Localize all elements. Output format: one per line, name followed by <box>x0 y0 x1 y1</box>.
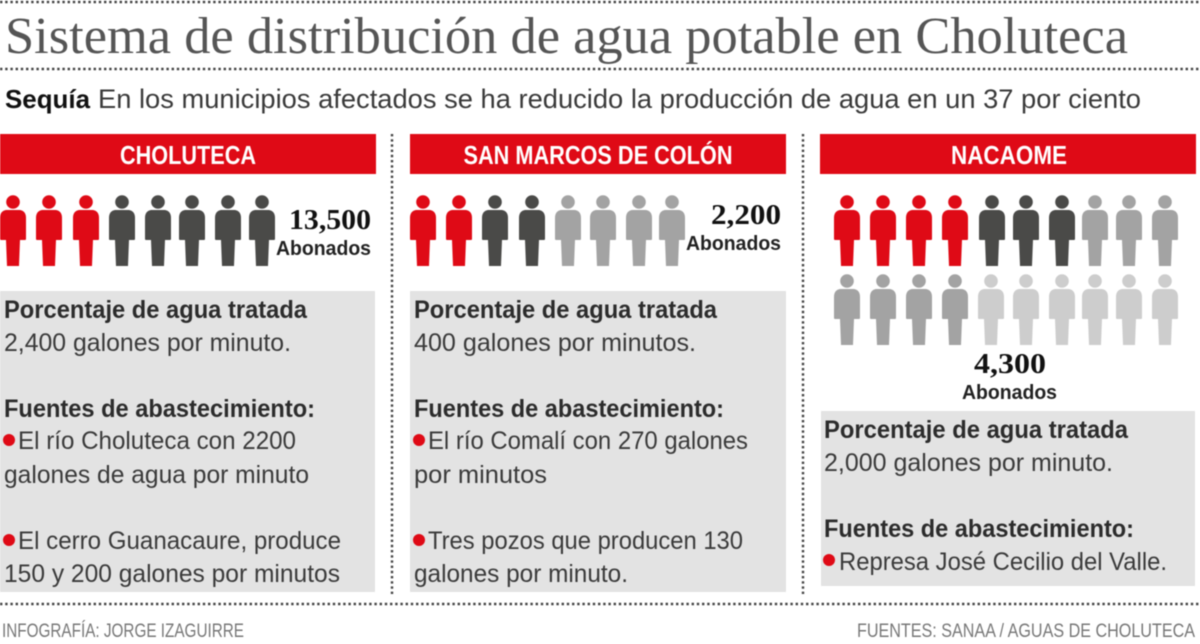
stat: 13,500 abonados: Abonados <box>276 238 371 260</box>
stat: 13,500 abonados <box>276 205 371 260</box>
info box: Choluteca: 150 y 200 galones por minutos <box>4 560 340 588</box>
title: Sistema de distribución de agua potable en Choluteca <box>5 8 1128 65</box>
stat: 4,300 abonados <box>962 349 1057 404</box>
subtitle: Sequía <box>5 84 91 114</box>
header: Choluteca <box>0 134 376 174</box>
info box: San Marcos de Colón: galones por minuto. <box>414 560 628 588</box>
info box: San Marcos de Colón: Tres pozos que producen 130 <box>428 527 743 555</box>
header: Choluteca: CHOLUTECA <box>120 140 256 170</box>
stat: 2,200 abonados <box>686 200 781 255</box>
header: Nacaome <box>820 134 1196 174</box>
pictogram: Nacaome subscribers <box>834 195 1178 345</box>
info box: Nacaome: 2,000 galones por minuto. <box>824 449 1113 477</box>
info box: San Marcos de Colón: 400 galones por minutos. <box>414 329 696 357</box>
info box: Choluteca: 2,400 galones por minuto. <box>4 329 291 357</box>
info box: Choluteca: El río Choluteca con 2200 <box>18 427 296 455</box>
info box: Nacaome: Fuentes de abastecimiento: <box>824 515 1134 543</box>
info box: Choluteca: galones de agua por minuto <box>4 461 309 489</box>
info box: Choluteca: Porcentaje de agua tratada <box>4 296 308 324</box>
info box: Nacaome: Porcentaje de agua tratada <box>824 416 1129 444</box>
subtitle: En los municipios afectados se ha reducido la producción de agua en un 37 por ciento <box>98 84 1141 114</box>
header: Nacaome: NACAOME <box>951 140 1067 170</box>
pictogram: San Marcos subscribers <box>410 195 685 266</box>
stat: 4,300 abonados: Abonados <box>962 382 1057 404</box>
info box: San Marcos de Colón: Porcentaje de agua tratada <box>414 296 718 324</box>
info box: Nacaome <box>821 411 1195 586</box>
panel: Nacaome <box>820 134 1196 586</box>
info box: San Marcos de Colón: Fuentes de abastecimiento: <box>414 395 724 423</box>
header: San Marcos de Colón <box>410 134 786 174</box>
panel: Choluteca <box>0 134 376 592</box>
stat: 2,200 abonados: Abonados <box>686 233 781 255</box>
pictogram: Choluteca subscribers <box>0 195 275 266</box>
info box: Nacaome: Represa José Cecilio del Valle. <box>839 548 1167 576</box>
stat: 4,300 abonados: 4,300 <box>974 349 1046 380</box>
info box: San Marcos de Colón: por minutos <box>414 461 547 489</box>
panel: San Marcos de Colón <box>410 134 786 592</box>
info box: San Marcos de Colón <box>410 291 786 592</box>
stat: 2,200 abonados: 2,200 <box>711 200 781 231</box>
stat: 13,500 abonados: 13,500 <box>289 205 371 236</box>
header: San Marcos de Colón: SAN MARCOS DE COLÓN <box>464 140 732 170</box>
info box: San Marcos de Colón: El río Comalí con 270 galones <box>428 427 748 455</box>
info box: Choluteca <box>0 291 375 592</box>
info box: Choluteca: Fuentes de abastecimiento: <box>4 395 315 423</box>
credit: INFOGRAFÍA: JORGE IZAGUIRRE <box>2 621 244 642</box>
info box: Choluteca: El cerro Guanacaure, produce <box>18 527 341 555</box>
